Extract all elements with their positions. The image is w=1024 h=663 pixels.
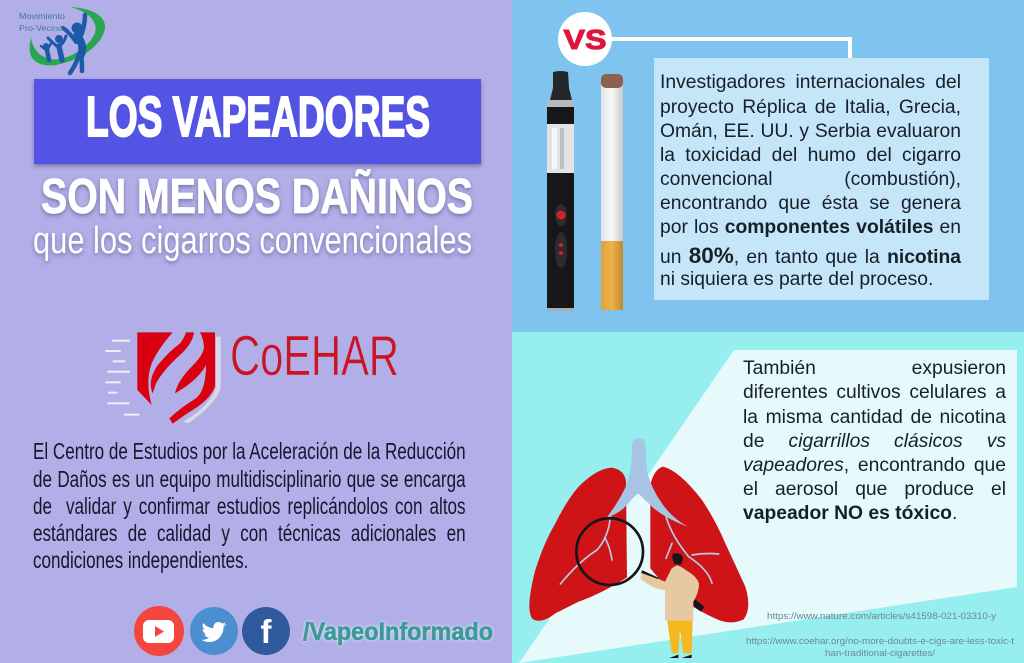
icon: lungs [529, 438, 748, 622]
icon: Movimiento Pro-Vecino logo [19, 7, 105, 73]
panel: first text box [654, 58, 989, 300]
icon: VS badge with connector: VS [564, 24, 606, 55]
icon: YouTube [134, 606, 184, 656]
icon: CoEHAR logo [105, 324, 399, 424]
icon: magnifying glass ring [576, 518, 643, 585]
panel: bottom right light spotlight [519, 350, 1017, 663]
text block: cell culture findings: la misma cantidad de nicotina [743, 407, 1006, 428]
panel: bottom right aqua background [512, 332, 1024, 663]
icon: Twitter [190, 607, 238, 655]
icon: VS badge with connector [558, 12, 850, 66]
heading: second line: SON MENOS DAÑINOS [41, 170, 473, 224]
text block: research summary: ni siquiera es parte del proceso. [660, 269, 933, 290]
text block: cell culture findings: vapeador NO es tóxico. [743, 503, 957, 524]
heading: title banner [34, 79, 481, 164]
text: social handle: /VapeoInformado [303, 618, 493, 646]
text block: CoEHAR description: de Daños es un equipo multidisciplinario que se encarga [33, 466, 466, 492]
text block: CoEHAR description [33, 438, 466, 573]
icon: Movimiento Pro-Vecino logo: Movimiento [19, 11, 65, 21]
text block: cell culture findings: diferentes cultivos celulares a [743, 382, 1006, 403]
text block: research summary: convencional (combustión), [660, 169, 961, 190]
heading: title banner: LOS VAPEADORES [86, 85, 430, 149]
icon: right lung [650, 467, 748, 622]
text block: cell culture findings: vapeadores, encontrando que [743, 455, 1006, 476]
icon: vaporizer pen [547, 71, 574, 311]
icon: cigarette [601, 74, 623, 310]
text block: cell culture findings: También expusieron [743, 358, 1006, 379]
text block: source links: https://www.nature.com/articles/s41598-021-03310-y [767, 611, 996, 622]
text block: research summary [660, 72, 962, 290]
text block: CoEHAR description: condiciones independientes. [33, 547, 248, 573]
text block: CoEHAR description: de validar y confirmar estudios replicándolos con altos [33, 493, 466, 519]
icon: CoEHAR logo: CoEHAR [230, 324, 399, 388]
icon: Movimiento Pro-Vecino logo: Pro-Vecino [19, 23, 63, 33]
text block: cell culture findings [743, 358, 1006, 524]
icon: Facebook: f [260, 613, 272, 650]
text block: research summary: Omán, EE. UU. y Serbia evaluaron [660, 121, 961, 142]
text block: source links: han-traditional-cigarettes/ [825, 648, 935, 659]
text block: research summary: Investigadores internacionales del [660, 72, 961, 93]
panel: left lilac background [0, 0, 512, 663]
icon: airways [607, 438, 688, 527]
heading: third line: que los cigarros convencionales [33, 220, 472, 262]
text block: research summary: encontrando que ésta se genera [660, 193, 961, 214]
icon: Facebook [242, 607, 290, 655]
text block: research summary: proyecto Réplica de Italia, Grecia, [660, 97, 961, 118]
text block: source links: https://www.coehar.org/no-more-doubts-e-cigs-are-less-toxic-t [746, 636, 1014, 647]
icon: researcher with magnifier handle [640, 553, 703, 658]
panel: top right blue background [512, 0, 1024, 332]
text block: research summary: por los componentes volátiles en [660, 217, 961, 238]
text block: research summary: un 80%, en tanto que la nicotina [660, 243, 961, 268]
icon: left lung [529, 468, 627, 621]
text block: research summary: la toxicidad del humo del cigarro [660, 145, 961, 166]
text block: CoEHAR description: estándares de calidad y con técnicas adicionales en [33, 520, 466, 546]
text block: cell culture findings: de cigarrillos clásicos vs [743, 431, 1006, 452]
text block: cell culture findings: el aerosol que produce el [743, 479, 1006, 500]
text block: CoEHAR description: El Centro de Estudios por la Aceleración de la Reducción [33, 438, 466, 464]
